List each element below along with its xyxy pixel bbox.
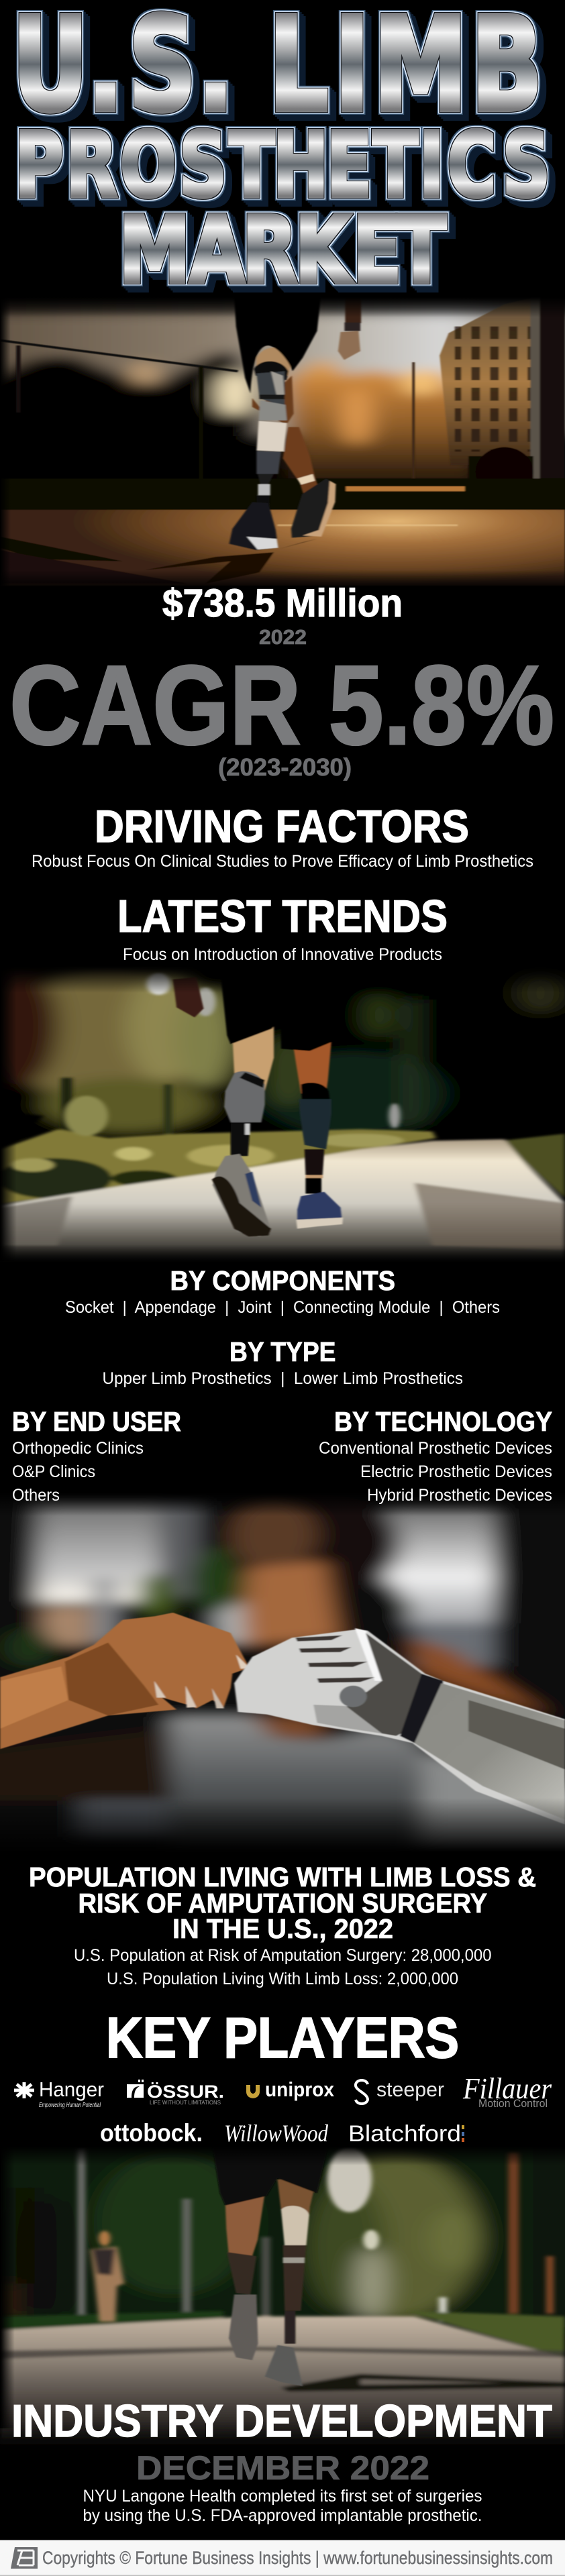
market size year: 2022	[259, 625, 307, 649]
title line: PROSTHETICS: PROSTHETICS	[15, 113, 550, 217]
segment: by end user	[12, 1406, 181, 1505]
logo: Hanger: Empowering Human Potential	[39, 2102, 101, 2109]
segment: by technology	[319, 1406, 552, 1505]
heading: latest trends: LATEST TRENDS	[117, 891, 448, 942]
latest trends text: Focus on Introduction of Innovative Products	[123, 945, 442, 964]
heading: population living with limb loss	[29, 1862, 536, 1944]
sub-element: prosthetic hand	[234, 1628, 565, 1825]
segment: by technology: Hybrid Prosthetic Devices	[367, 1486, 552, 1505]
segment: by end user: Others	[12, 1486, 60, 1505]
logo: uniprox: uniprox	[265, 2078, 335, 2101]
type list: Upper Limb Prosthetics | Lower Limb Prosthetics	[102, 1369, 463, 1388]
development text	[83, 2487, 482, 2525]
logo: Fillauer: Fillauer	[462, 2072, 552, 2105]
development text: by using the U.S. FDA-approved implantable prosthetic.	[83, 2506, 482, 2525]
title line: MARKET: MARKET	[119, 197, 446, 303]
components list: Socket | Appendage | Joint | Connecting Module | Others	[65, 1298, 500, 1317]
sub-element: walker legs	[173, 966, 343, 1236]
logo: Ossur: ÖSSUR.	[147, 2082, 224, 2102]
sub-element: runner legs	[213, 2147, 328, 2386]
development date: DECEMBER 2022	[136, 2449, 429, 2487]
market size value: $738.5 Million	[162, 582, 403, 625]
logo: ottobock: ottobock.	[100, 2119, 203, 2147]
population at risk stat: U.S. Population at Risk of Amputation Surgery: 28,000,000	[74, 1946, 491, 1965]
logo: Hanger: Hanger	[39, 2078, 104, 2101]
photo: woman touching prosthetic hand	[0, 1489, 565, 1865]
logo: Hanger	[14, 2078, 104, 2109]
heading: population living with limb loss: RISK OF AMPUTATION SURGERY	[78, 1888, 487, 1919]
title	[13, 0, 550, 303]
heading: population living with limb loss: IN THE U.S., 2022	[172, 1913, 393, 1944]
logo: Blatchford: Blatchford	[348, 2121, 461, 2147]
segment: by type: BY TYPE	[229, 1336, 336, 1367]
icon: Fortune Business Insights logo	[11, 2547, 38, 2569]
logo: Fillauer: Motion Control	[478, 2097, 548, 2110]
photo: runner with prosthetic leg at sunset	[0, 290, 565, 586]
development text: NYU Langone Health completed its first set of surgeries	[83, 2487, 482, 2506]
heading: driving factors: DRIVING FACTORS	[95, 801, 469, 852]
CAGR period: (2023-2030)	[218, 753, 352, 781]
population living with limb loss stat: U.S. Population Living With Limb Loss: 2,000,000	[107, 1970, 458, 1988]
heading: population living with limb loss: POPULATION LIVING WITH LIMB LOSS &	[29, 1862, 536, 1892]
segment: by end user: Orthopedic Clinics	[12, 1439, 144, 1458]
segment: by components: BY COMPONENTS	[170, 1265, 395, 1296]
sub-element: background pedestrian	[90, 2231, 124, 2322]
segment: by end user: O&P Clinics	[12, 1462, 95, 1481]
sub-element: runner legs	[229, 297, 361, 550]
segment: by technology: Electric Prosthetic Devices	[360, 1462, 552, 1481]
logo: steeper	[356, 2078, 444, 2104]
driving factors text: Robust Focus On Clinical Studies to Prove Efficacy of Limb Prosthetics	[32, 852, 533, 871]
heading: key players: KEY PLAYERS	[106, 2006, 459, 2070]
segment: by technology: Conventional Prosthetic Devices	[319, 1439, 552, 1458]
footer bar	[0, 2540, 565, 2576]
photo: person walking on park path with two prosthetic legs	[0, 966, 565, 1263]
sub-element: human hand	[0, 1613, 250, 1749]
segment: by end user: BY END USER	[12, 1406, 181, 1437]
logo: Ossur	[127, 2080, 224, 2106]
logo: steeper: steeper	[376, 2078, 444, 2101]
logo: Ossur: LIFE WITHOUT LIMITATIONS	[150, 2100, 221, 2106]
logo: WillowWood: WillowWood	[224, 2120, 329, 2147]
photo: runner on tree-lined road	[0, 2131, 565, 2451]
